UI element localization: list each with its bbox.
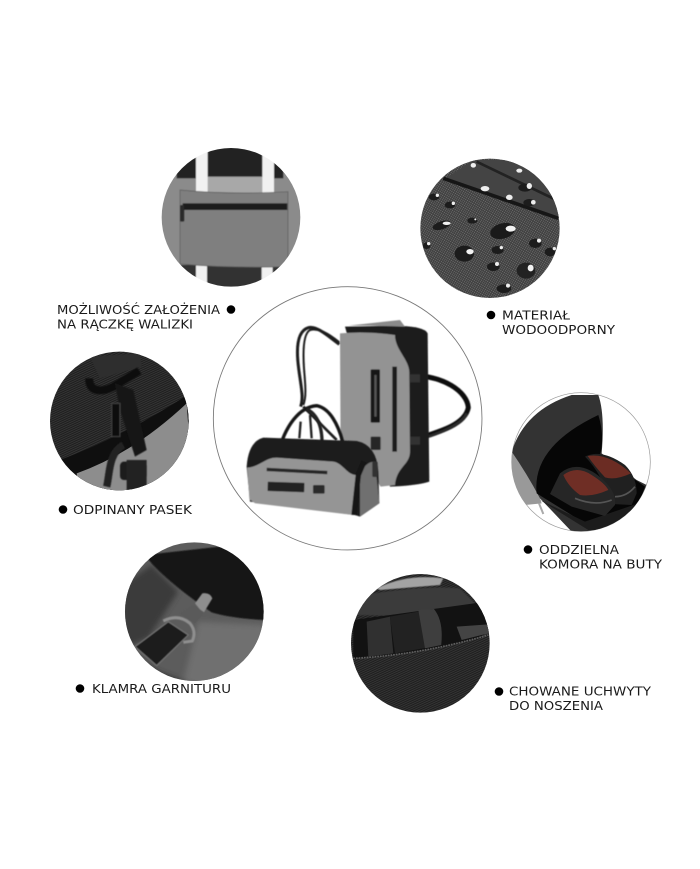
label: waterproof material: MATERIAŁ <box>502 308 570 322</box>
central circle with bags <box>213 287 482 550</box>
droplets <box>423 163 556 293</box>
label: hidden carry handles <box>495 684 652 713</box>
shoes <box>550 454 637 516</box>
label: waterproof material <box>487 308 616 337</box>
photo circle: separate shoe compartment <box>510 393 650 532</box>
label: luggage handle mount: NA RĄCZKĘ WALIZKI <box>57 318 193 332</box>
thin outline <box>512 393 650 531</box>
photo circle: waterproof fabric with droplets <box>417 157 563 300</box>
label: shoe compartment: ODDZIELNA <box>539 543 620 557</box>
label: hidden carry handles: DO NOSZENIA <box>509 699 604 713</box>
label: hidden carry handles: CHOWANE UCHWYTY <box>509 684 652 698</box>
label: shoe compartment: KOMORA NA BUTY <box>539 558 663 572</box>
label: detachable strap: ODPINANY PASEK <box>73 503 193 517</box>
label: luggage handle mount <box>57 302 235 332</box>
photo circle: hidden carry handles <box>351 574 490 713</box>
label: shoe compartment <box>524 543 663 572</box>
photo circle: suit clip <box>122 542 268 688</box>
photo circle: luggage handle sleeve <box>160 147 303 290</box>
duffel bag <box>247 406 379 517</box>
photo circle: detachable strap clasp <box>50 352 189 490</box>
label: luggage handle mount: MOŻLIWOŚĆ ZAŁOŻENIA <box>57 302 221 317</box>
circle outline <box>213 287 482 550</box>
standing bag <box>297 320 468 487</box>
label: waterproof material: WODOODPORNY <box>502 323 616 337</box>
label: suit clip: KLAMRA GARNITURU <box>92 682 231 696</box>
